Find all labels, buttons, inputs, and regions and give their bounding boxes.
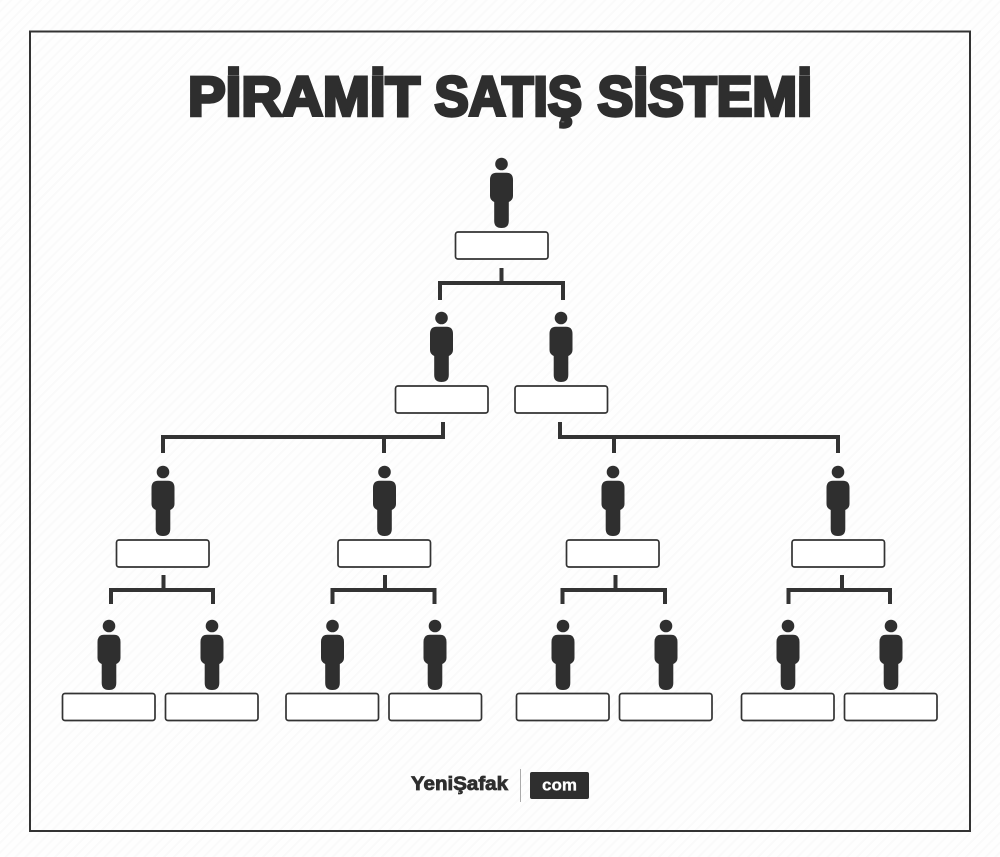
connector: level 2 right to level 3	[560, 422, 838, 453]
person: top	[490, 158, 513, 228]
name box: level 3 second	[338, 540, 430, 567]
name box: top	[456, 232, 548, 259]
name box: level 4 fourth	[389, 694, 482, 720]
name box: level 3 third	[566, 540, 659, 567]
person: level 3 third	[602, 466, 624, 536]
person: level 3 second	[373, 466, 396, 536]
name box: level 4 seventh	[742, 694, 834, 720]
name box: level 4 eighth	[844, 694, 937, 720]
person: level 4 fifth	[552, 620, 574, 690]
name box: level 2 left	[396, 386, 488, 413]
logo divider	[520, 769, 521, 802]
person: level 2 left	[430, 312, 453, 382]
logo com badge: com	[542, 776, 577, 794]
person: level 4 sixth	[654, 620, 678, 690]
connector: level 3 group 3	[562, 575, 665, 604]
person: level 2 right	[550, 312, 572, 382]
name box: level 2 right	[515, 386, 608, 413]
logo	[411, 769, 589, 802]
person: level 4 second	[200, 620, 224, 690]
name box: level 4 first	[62, 694, 155, 720]
name box: level 4 fifth	[516, 694, 609, 720]
logo com badge	[530, 772, 589, 799]
person: level 4 fourth	[424, 620, 446, 690]
title word 2: SATIŞ	[434, 64, 582, 128]
pyramid chart	[62, 158, 937, 720]
name box: level 3 first	[116, 540, 209, 567]
connector: level 2 left to level 3	[163, 422, 443, 453]
title	[188, 64, 812, 128]
connector: level 3 group 4	[788, 575, 890, 604]
connector: level 3 group 1	[111, 575, 213, 604]
title word 1: PİRAMİT	[188, 64, 420, 128]
name box: level 4 sixth	[620, 694, 712, 720]
title word 3: SİSTEMİ	[598, 64, 812, 128]
logo wordmark: YeniŞafak	[411, 774, 508, 795]
connector: level 3 group 2	[332, 575, 434, 604]
name box: level 4 third	[286, 694, 378, 720]
person: level 4 eighth	[880, 620, 902, 690]
person: level 4 seventh	[776, 620, 800, 690]
name box: level 3 fourth	[792, 540, 884, 567]
person: level 3 first	[152, 466, 174, 536]
person: level 4 first	[98, 620, 120, 690]
connector: level 1 to level 2	[440, 268, 563, 300]
person: level 4 third	[321, 620, 344, 690]
person: level 3 fourth	[826, 466, 850, 536]
name box: level 4 second	[166, 694, 258, 720]
